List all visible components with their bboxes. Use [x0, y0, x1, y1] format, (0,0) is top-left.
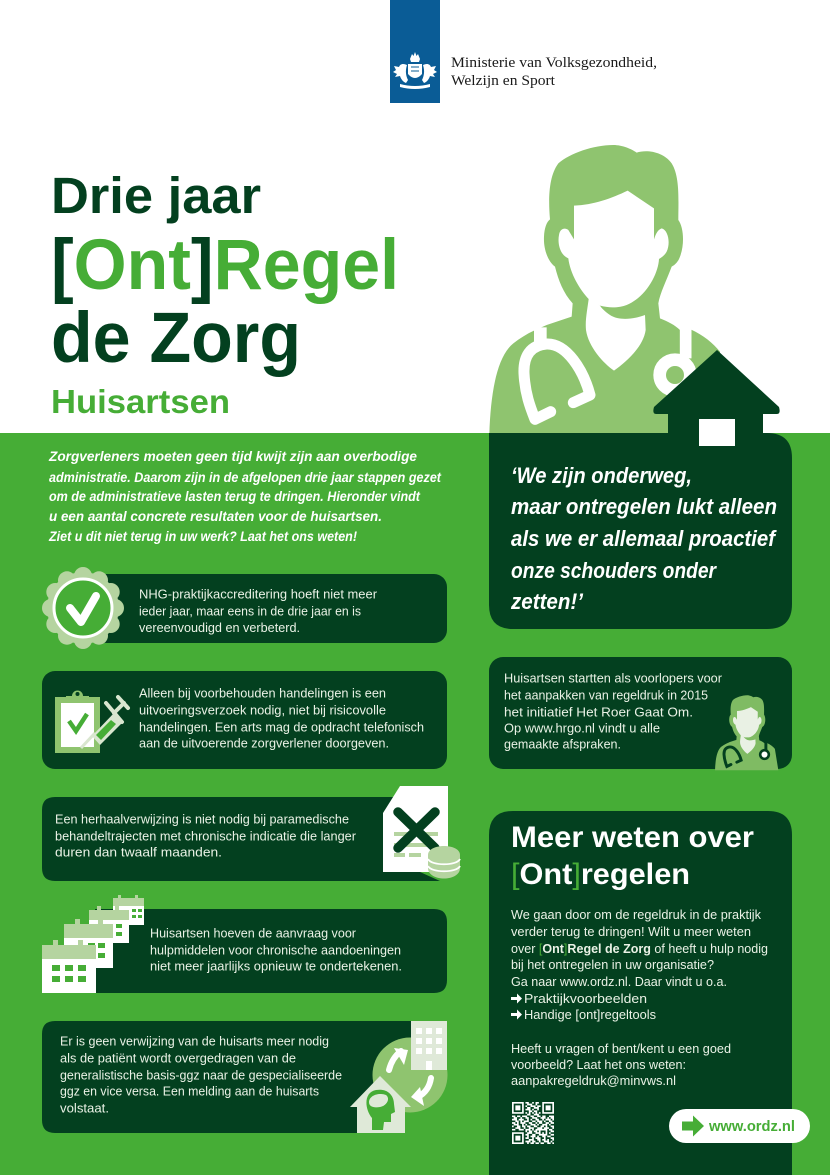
Het Roer Gaat Om text: Op www.hrgo.nl vindt u alle	[504, 722, 660, 736]
reserved procedures text: aan de uitvoerende zorgverlener doorgeven.	[139, 736, 389, 750]
repeat referral text	[55, 812, 356, 860]
ggz transfer text: Er is geen verwijzing van de huisarts meer nodig	[60, 1034, 329, 1048]
reserved procedures text	[139, 686, 424, 750]
repeat referral text: behandeltrajecten met chronische indicatie die langer	[55, 830, 356, 844]
reserved procedures text: Alleen bij voorbehouden handelingen is een	[139, 686, 386, 700]
quote text: onze schouders onder	[511, 558, 717, 583]
title: Huisartsen	[51, 383, 230, 420]
intro text	[48, 449, 441, 544]
body text: Ga naar www.ordz.nl. Daar vindt u o.a.	[511, 975, 727, 989]
heading: [Ont]regelen	[511, 858, 690, 891]
title	[51, 167, 399, 420]
body text: Heeft u vragen of bent/kent u een goed	[511, 1042, 731, 1056]
quote text: zetten!’	[510, 589, 584, 614]
panel: aids	[42, 895, 447, 993]
body text: Praktijkvoorbeelden	[524, 992, 647, 1006]
icon: check badge	[42, 567, 124, 649]
intro text: Ziet u dit niet terug in uw werk? Laat het ons weten!	[48, 529, 357, 544]
ggz transfer text: volstaat.	[60, 1102, 109, 1116]
quote text	[510, 463, 777, 614]
green background band	[0, 433, 830, 1175]
body text: Handige [ont]regeltools	[524, 1008, 656, 1022]
aids text: Huisartsen hoeven de aanvraag voor	[150, 926, 356, 940]
aids text	[150, 926, 402, 974]
body text: We gaan door om de regeldruk in de praktijk	[511, 908, 762, 922]
panel: Het Roer Gaat Om	[489, 657, 792, 770]
repeat referral text: duren dan twaalf maanden.	[55, 846, 222, 860]
logo: Rijksoverheid ribbon with emblem	[390, 0, 440, 103]
accreditation text: NHG-praktijkaccreditering hoeft niet meer	[139, 588, 377, 602]
panel: quote	[489, 350, 792, 629]
accreditation text: vereenvoudigd en verbeterd.	[139, 621, 300, 635]
title: de Zorg	[51, 299, 301, 378]
panel: ggz transfer	[42, 1021, 448, 1133]
ggz transfer text: generalistische basis-ggz naar de gespecialiseerde	[60, 1068, 342, 1082]
intro text: u een aantal concrete resultaten voor de huisartsen.	[49, 509, 382, 524]
Het Roer Gaat Om text	[504, 672, 722, 752]
body text: verder terug te dringen! Wilt u meer weten	[511, 925, 751, 939]
button: www.ordz.nl: www.ordz.nl	[708, 1118, 795, 1135]
accreditation text: ieder jaar, maar eens in de drie jaar en is	[139, 604, 361, 618]
quote text: maar ontregelen lukt alleen	[511, 494, 777, 519]
title: [Ont]Regel	[51, 226, 399, 305]
ggz transfer text: ggz en vice versa. Een melding aan de huisarts	[60, 1084, 319, 1098]
Het Roer Gaat Om text: het initiatief Het Roer Gaat Om.	[504, 706, 693, 720]
quote text: als we er allemaal proactief	[511, 526, 777, 551]
ggz transfer text: als de patiënt wordt overgedragen van de	[60, 1052, 296, 1066]
intro text: Zorgverleners moeten geen tijd kwijt zijn aan overbodige	[48, 449, 417, 464]
body text: over [Ont]Regel de Zorg of heeft u hulp nodig	[511, 942, 768, 956]
body text: voorbeeld? Laat het ons weten:	[511, 1058, 686, 1072]
icon: clipboard and syringe	[55, 690, 128, 753]
panel: repeat referral	[42, 786, 460, 881]
body text	[511, 908, 768, 1088]
ministry name	[451, 55, 657, 89]
Het Roer Gaat Om text: gemaakte afspraken.	[504, 738, 621, 752]
intro text: om de administratieve lasten terug te dringen. Hieronder vindt	[49, 489, 420, 504]
panel: reserved procedures	[42, 671, 447, 769]
ggz transfer text	[60, 1034, 342, 1116]
Het Roer Gaat Om text: Huisartsen startten als voorlopers voor	[504, 672, 722, 686]
heading	[511, 821, 754, 891]
icon: small doctor	[715, 695, 778, 770]
Het Roer Gaat Om text: het aanpakken van regeldruk in 2015	[504, 688, 708, 702]
button: www.ordz.nl	[669, 1109, 810, 1143]
icon: crossed document and coins	[383, 786, 460, 878]
QR code	[512, 1103, 554, 1143]
icon: calendars	[42, 895, 144, 993]
heading: Meer weten over	[511, 821, 754, 854]
aids text: hulpmiddelen voor chronische aandoeningen	[150, 944, 401, 958]
icon: house and building exchange	[350, 1021, 448, 1133]
body text: bij het ontregelen in uw organisatie?	[511, 958, 714, 972]
body text: aanpakregeldruk@minvws.nl	[511, 1074, 676, 1088]
icon: doctor illustration	[489, 145, 720, 434]
title: Drie jaar	[51, 167, 261, 224]
accreditation text	[139, 588, 377, 635]
repeat referral text: Een herhaalverwijzing is niet nodig bij paramedische	[55, 812, 349, 826]
ministry name: Welzijn en Sport	[451, 73, 556, 89]
reserved procedures text: handelingen. Een arts mag de opdracht telefonisch	[139, 720, 424, 734]
reserved procedures text: uitvoeringsverzoek nodig, niet bij risicovolle	[139, 704, 386, 718]
intro text: administratie. Daarom zijn in de afgelopen drie jaar stappen gezet	[49, 470, 441, 485]
aids text: niet meer jaarlijks opnieuw te ondertekenen.	[150, 960, 402, 974]
icon: house	[653, 350, 780, 446]
panel: more information	[489, 811, 810, 1175]
panel: accreditation	[42, 567, 447, 649]
quote text: ‘We zijn onderweg,	[511, 463, 692, 488]
ministry name: Ministerie van Volksgezondheid,	[451, 55, 657, 71]
